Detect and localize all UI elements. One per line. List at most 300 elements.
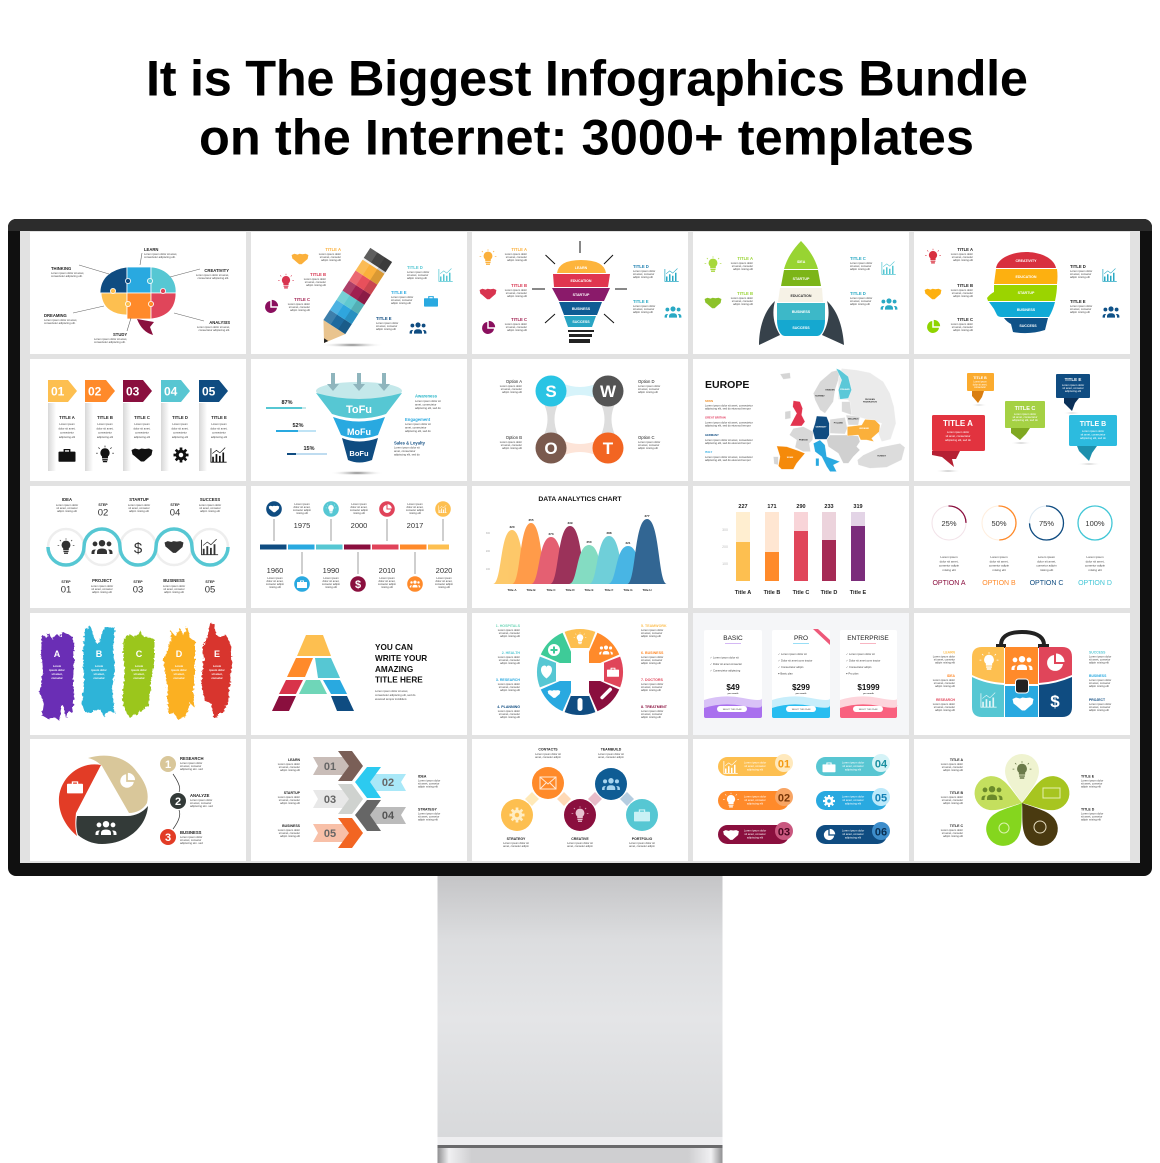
label: success: SUCCESS <box>1089 650 1106 654</box>
label: analysis: consectetur adipiscing elit. <box>198 328 230 332</box>
item: title b: adipin mising elit <box>507 294 527 298</box>
step 3 <box>160 829 203 845</box>
item: title e: adipin mising elit <box>1070 310 1090 314</box>
monitor bezel <box>8 219 1152 876</box>
label: learn <box>933 650 956 664</box>
map of Europe: UKRAINE <box>859 427 869 430</box>
column e text <box>211 415 228 439</box>
event 2010: consetur adipin <box>378 582 397 586</box>
head layers: CREATIVITY <box>1015 259 1037 263</box>
label: business: adipin mising elit <box>1089 684 1109 688</box>
hump values: 250 <box>586 540 592 544</box>
item: title c: TITLE C <box>294 297 310 302</box>
option d <box>1078 555 1112 587</box>
item: title e dark: adipin mising elit <box>376 327 396 331</box>
panel: triangle cycle <box>30 739 246 861</box>
brush A: ipsum dolor <box>49 668 65 672</box>
arrows <box>327 373 390 391</box>
event 1960: mising elit <box>269 585 281 589</box>
label: business: Lorem ipsum dolor <box>163 585 185 588</box>
bar E: 319 <box>853 504 863 510</box>
event 1975: mising elit <box>296 511 308 515</box>
event 1975: dolor sit amet, <box>294 505 311 509</box>
label 2: sit amet, consetur <box>499 658 520 662</box>
label 2: adipin mising elit <box>500 661 520 665</box>
event 2010 <box>378 566 397 589</box>
step 1: RESEARCH <box>180 756 204 761</box>
funnel MoFu <box>333 417 385 438</box>
column c text <box>134 415 151 439</box>
item: title e blue: sit amet, consetur <box>391 298 412 302</box>
brush B: B <box>96 649 103 659</box>
label 5 <box>641 624 667 638</box>
bar B: 171 <box>767 504 777 510</box>
hump values: 320 <box>509 525 515 529</box>
panel: chevron arrows <box>251 739 467 861</box>
item: title d: adipin mising elit <box>1070 275 1090 279</box>
event 2000 <box>350 502 369 530</box>
event 1990: dolor sit amet, <box>323 579 340 583</box>
label: title e <box>1081 774 1103 788</box>
brush B: sit amet, <box>94 672 105 676</box>
label: awareness: adipiscing elit, sed do <box>415 406 441 410</box>
plan: enterprise: $1999 <box>857 683 880 692</box>
plan: basic <box>704 630 762 718</box>
label: strategy: amet, consetur adipin <box>503 844 529 848</box>
arrow 04: 04 <box>382 810 395 822</box>
icon: people <box>92 540 112 554</box>
option c: dolor sit amet, <box>1037 559 1056 563</box>
column e text: dolor sit amet, <box>211 426 228 430</box>
pill 03: adipiscing elit <box>747 835 763 839</box>
pill 06: sit amet, consetur <box>842 832 864 836</box>
label: project: PROJECT <box>1089 698 1106 702</box>
icon: bulb <box>58 538 74 554</box>
label: sales and loyalty: Sales & Loyalty <box>394 440 426 446</box>
panel: paint brushes <box>30 613 246 735</box>
tag: title a: TITLE A <box>943 419 973 428</box>
brush C: ipsum dolor <box>131 668 147 672</box>
label: creative: amet, consetur adipin <box>567 844 593 848</box>
map of Europe: FEDERATION <box>863 401 877 404</box>
step 3: sit amet, consetur <box>180 838 201 842</box>
option b: sit amet, consetur <box>501 443 522 447</box>
funnel BoFu: BoFu <box>349 449 369 458</box>
connecting arc <box>173 774 180 829</box>
step 1 <box>160 756 204 772</box>
pill 04: adipiscing elit <box>845 767 861 771</box>
petal upper right <box>1017 772 1074 819</box>
letter A mosaic <box>272 635 354 711</box>
ring 50%: 50% <box>991 519 1007 528</box>
event 2017: 2017 <box>407 521 423 530</box>
pill 06: adipiscing elit <box>845 835 861 839</box>
head layers: SUCCESS <box>1019 324 1037 328</box>
circle W <box>592 376 624 406</box>
tag shadows <box>935 404 1101 472</box>
tag 05 <box>199 380 228 402</box>
item: title d <box>407 265 429 280</box>
arrow 02: 02 <box>382 777 394 789</box>
item: title d: adipin mising elit <box>850 302 870 306</box>
brush D: D <box>176 649 183 659</box>
item: title d: TITLE D <box>1070 264 1086 269</box>
label: idea: adipin mising elit <box>57 509 77 513</box>
heading: TITLE HERE <box>375 676 423 684</box>
label: project: sit amet, consetur <box>1089 705 1110 709</box>
tag 03 <box>123 380 152 402</box>
beige segment <box>88 756 148 813</box>
icon: people <box>410 322 426 334</box>
label: title b <box>941 791 963 805</box>
bar C <box>793 504 809 596</box>
plan: basic: per month <box>728 692 739 695</box>
label: title b: adipin mising elit <box>943 801 963 805</box>
event 2010: Lorem ipsum <box>379 577 395 580</box>
arrow 05 <box>313 818 363 848</box>
label: thinking <box>51 266 84 278</box>
pill 03 <box>718 822 793 844</box>
label: dreaming: DREAMING <box>44 313 67 318</box>
item: title c: Lorem ipsum dolor <box>850 262 872 265</box>
icon: gear <box>174 448 188 462</box>
column b text: consectetur <box>98 431 112 435</box>
event 2000: consetur adipin <box>350 508 369 512</box>
item: title a <box>319 247 341 262</box>
brush E <box>201 623 232 718</box>
item: title b <box>304 272 326 287</box>
label: step 03: STEP <box>133 580 143 584</box>
icon: pie <box>927 320 940 333</box>
label: contacts: amet, consetur adipin <box>535 755 561 759</box>
country note: Spain: Lorem ipsum dolor sit amet, consectetur <box>705 404 753 408</box>
option b: OPTION B <box>982 580 1016 587</box>
label: step 01: STEP <box>61 580 71 584</box>
item: title b: Lorem ipsum dolor <box>505 289 527 292</box>
label: idea <box>933 674 956 688</box>
axis labels: 300 <box>486 532 491 535</box>
label 3: adipin mising elit <box>500 688 520 692</box>
label: portfolio: PORTFOLIO <box>632 837 652 841</box>
pill 03: 03 <box>778 826 790 838</box>
label: title c: TITLE C <box>950 824 963 828</box>
event 2020: mising elit <box>438 585 450 589</box>
step 2: Lorem ipsum dolor <box>190 799 212 802</box>
bar B <box>764 504 780 596</box>
label 8: adipin mising elit <box>641 715 661 719</box>
label: sales and loyalty <box>394 440 426 456</box>
tag: title a <box>932 415 985 467</box>
plan: basic: ✓ Consectetur adipiscing <box>710 668 741 672</box>
item: title d: Lorem ipsum dolor <box>850 297 872 300</box>
bar B: Title B <box>764 590 780 596</box>
icon: people <box>96 821 116 835</box>
label 8: Lorem ipsum dolor <box>641 710 663 713</box>
plan: pro: $299 <box>792 683 810 692</box>
column a text: dolor sit amet, <box>59 426 76 430</box>
item: title b: TITLE B <box>310 272 326 277</box>
label: business: Lorem ipsum dolor <box>278 829 300 832</box>
label: idea <box>56 497 78 513</box>
label: business: adipin mising elit <box>164 590 184 594</box>
label 5: sit amet, consetur <box>641 631 662 635</box>
tag: title e: Lorem ipsum dolor <box>1062 384 1084 387</box>
column shadows <box>48 403 207 471</box>
country note: Italy: adipiscing elit, sed do eiusmod tempor <box>705 458 751 462</box>
option d: consetur adipin <box>1085 564 1105 568</box>
bar D: 233 <box>824 504 834 510</box>
option b: adipin mising elit <box>502 446 522 450</box>
label: title b: Lorem ipsum dolor <box>941 796 963 799</box>
hump titles: Title F <box>605 588 614 592</box>
handle <box>996 632 1049 646</box>
brush C <box>122 630 154 718</box>
head layers: EDUCATION <box>1015 275 1037 279</box>
map of Europe: FRANCE <box>799 439 808 442</box>
node: contacts <box>532 767 564 799</box>
option d: Lorem ipsum <box>1086 555 1104 559</box>
option a: sit amet, consetur <box>501 387 522 391</box>
map of Europe: RUSSIAN <box>865 398 875 401</box>
hump titles: Title G <box>623 588 633 592</box>
tag 02: 02 <box>88 384 102 398</box>
pill 06: 06 <box>875 826 887 838</box>
item: title a: Lorem ipsum dolor <box>951 253 973 256</box>
item: title c <box>288 297 310 312</box>
item: title c: TITLE C <box>850 256 866 261</box>
label: title a: adipin mising elit <box>943 768 963 772</box>
bulb layers: SUCCESS <box>572 320 590 324</box>
label 6: Lorem ipsum dolor <box>641 656 663 659</box>
event 2020 <box>435 566 454 589</box>
item: title c: adipin mising elit <box>507 328 527 332</box>
item: title b <box>731 291 753 306</box>
label: idea: sit amet, consetur <box>56 506 78 510</box>
label: learn <box>278 758 300 772</box>
item: title b: sit amet, consetur <box>305 280 326 284</box>
panel: letter A <box>251 613 467 735</box>
item: title b: sit amet, consetur <box>506 291 527 295</box>
pill 01: adipiscing elit <box>747 767 763 771</box>
step 3: 3 <box>165 832 171 844</box>
head layers: STARTUP <box>1018 291 1035 295</box>
heading: AMAZING <box>375 665 413 674</box>
label: startup: Lorem ipsum dolor <box>278 796 300 799</box>
item: title b: TITLE B <box>957 283 973 288</box>
label: startup: sit amet, consetur <box>128 506 150 510</box>
step 1: 1 <box>165 759 171 771</box>
column c text: TITLE C <box>134 415 150 420</box>
hump titles: Title A <box>507 588 517 592</box>
chart title: DATA ANALYTICS CHART <box>538 496 622 503</box>
brush E: ipsum dolor <box>209 668 225 672</box>
event 2000: 2000 <box>351 521 367 530</box>
arrow 02 <box>355 767 406 798</box>
panel: funnel <box>251 359 467 481</box>
arrow 03 <box>313 784 363 814</box>
tag: title b small: TITLE B <box>973 376 987 380</box>
option c: Lorem ipsum dolor <box>638 441 660 444</box>
item: title e <box>1070 299 1092 314</box>
label: startup: STARTUP <box>129 497 149 502</box>
event 1990: Lorem ipsum <box>323 577 339 580</box>
plan: enterprise: per month <box>863 692 875 695</box>
pin 1 <box>266 501 282 517</box>
label 7: sit amet, consetur <box>641 685 662 689</box>
label: creativity: CREATIVITY <box>204 268 229 273</box>
item: title a <box>951 247 973 262</box>
icon: chart <box>438 268 453 282</box>
item: title d: adipin mising elit <box>407 276 427 280</box>
arrow 01 <box>313 751 363 781</box>
event 1975 <box>293 502 312 530</box>
pill 02: Lorem ipsum dolor <box>744 796 766 798</box>
label: thinking: THINKING <box>51 266 71 271</box>
pin 3 <box>379 501 395 517</box>
pill 03: sit amet, consetur <box>744 832 766 836</box>
column a text: consectetur <box>60 431 74 435</box>
item: title e dark <box>376 316 398 331</box>
label: startup: sit amet, consetur <box>279 798 300 802</box>
item: title c: sit amet, consetur <box>952 325 973 329</box>
brush A: Lorem <box>53 665 61 668</box>
label: success: Lorem ipsum dolor <box>199 504 221 507</box>
hump values <box>509 514 650 545</box>
map of Europe: BELARUS <box>848 417 859 420</box>
label 6: sit amet, consetur <box>641 658 662 662</box>
tag: title c <box>1005 401 1045 440</box>
pill 04 <box>816 754 890 776</box>
label: learn: Lorem ipsum dolor <box>933 656 955 658</box>
label: learn: Lorem ipsum dolor <box>278 763 300 766</box>
option a <box>932 555 966 587</box>
bar 52%: 52% <box>292 423 304 429</box>
circle W: W <box>600 382 617 401</box>
label: title c: adipin mising elit <box>943 834 963 838</box>
plan: pro: ✓ Dolor sit amet cons tractor <box>778 658 812 662</box>
body text: Lorem ipsum dolor sit amet, <box>375 690 408 693</box>
column c text: adipiscing elit <box>134 435 150 439</box>
map of Europe: GERMANY <box>815 425 827 428</box>
bulb layers: STARTUP <box>573 293 590 297</box>
label 7: adipin mising elit <box>641 688 661 692</box>
ring 100%: 100% <box>1085 519 1105 528</box>
pill 06: Lorem ipsum dolor <box>842 830 864 832</box>
pill 01: 01 <box>778 758 790 770</box>
bag icons: $ <box>1050 692 1060 711</box>
item: title a: TITLE A <box>325 247 341 252</box>
label: idea: adipin mising elit <box>935 684 955 688</box>
option c <box>1030 555 1063 587</box>
rocket body: EDUCATION <box>790 294 812 298</box>
column e text: adipiscing elit <box>211 435 227 439</box>
item: title b: adipin mising elit <box>733 302 753 306</box>
item: title b: sit amet, consetur <box>952 291 973 295</box>
panel: head <box>914 232 1130 354</box>
item: title d: sit amet, consetur <box>633 272 654 276</box>
label: analysis: Lorem ipsum dolor sit amet, <box>197 326 230 329</box>
item: title d <box>850 291 872 306</box>
item: title e: Lorem ipsum dolor <box>1070 305 1092 308</box>
wave line <box>48 529 228 565</box>
bar A <box>735 504 751 596</box>
label 1 <box>496 624 521 638</box>
petal lower left <box>979 793 1036 853</box>
label: startup: adipin mising elit <box>129 509 149 513</box>
icon: pie <box>120 773 135 788</box>
tag: title a: adipiscing elit, sed do <box>945 438 971 442</box>
title: It is The Biggest Infographics Bundle <box>146 50 1028 106</box>
event 2000: mising elit <box>353 511 365 515</box>
option c: Option C <box>638 435 655 440</box>
item: title c: Lorem ipsum dolor <box>505 323 527 326</box>
hump titles: Title D <box>565 588 575 592</box>
event 2017 <box>406 502 425 530</box>
pill 01: sit amet, consetur <box>744 764 766 768</box>
brush B: Lorem <box>95 665 103 668</box>
label 7: 7. DOCTORS <box>641 678 664 682</box>
country note: Great Britain: adipiscing elit, sed do eiusmod tempor <box>705 424 751 428</box>
label 4: Lorem ipsum dolor <box>498 710 520 713</box>
column b text: Lorem ipsum <box>97 423 113 426</box>
label: step 03: 03 <box>133 584 143 596</box>
event 2010: mising elit <box>381 585 393 589</box>
item: title e: sit amet, consetur <box>633 307 654 311</box>
column c text: dolor sit amet, <box>134 426 151 430</box>
map of Europe <box>773 368 905 472</box>
column e text: Lorem ipsum <box>211 423 227 426</box>
icon: briefcase <box>424 296 438 307</box>
item: title c <box>951 317 973 332</box>
funnel ToFu <box>316 393 402 418</box>
label: analysis: ANALYSIS <box>209 320 230 325</box>
country note: Germany: adipiscing elit, sed do eiusmod tempor <box>705 441 751 445</box>
panel: speech tags <box>914 359 1130 481</box>
option d: mising elit <box>1088 568 1102 572</box>
rings <box>48 529 228 565</box>
label: business <box>278 824 301 838</box>
label: business: Lorem ipsum dolor <box>1089 679 1111 682</box>
plan: enterprise: ENTERPRISE <box>847 635 889 642</box>
option b: Lorem ipsum dolor <box>500 441 522 444</box>
bar A: 227 <box>738 504 748 510</box>
item: title a: sit amet, consetur <box>320 255 341 259</box>
label: business: sit amet, consetur <box>279 831 300 835</box>
rocket body: IDEA <box>797 260 806 264</box>
label: project: Lorem ipsum dolor <box>91 585 113 588</box>
tag: title b blue: adipiscing elit, sed do <box>1080 436 1106 440</box>
pill 05 <box>816 788 890 810</box>
label: study: consectetur adipiscing elit. <box>94 340 126 344</box>
panel: Europe map <box>693 359 909 481</box>
event 1990: 1990 <box>323 566 339 575</box>
label 3 <box>496 678 520 692</box>
column a text: adipiscing elit <box>59 435 75 439</box>
hump titles: Title H <box>642 588 652 592</box>
plan: pro: per month <box>796 692 807 695</box>
item: title e blue: adipin mising elit <box>391 301 411 305</box>
bar 52% <box>276 423 316 432</box>
label 1: sit amet, consetur <box>499 631 520 635</box>
label: business: sit amet, consetur <box>163 587 185 591</box>
item: title c: Lorem ipsum dolor <box>951 323 973 326</box>
brush B: consetur <box>93 676 105 680</box>
label 5: adipin mising elit <box>641 634 661 638</box>
brush B: ipsum dolor <box>91 668 107 672</box>
icon: briefcase <box>67 781 83 793</box>
panel: pencil <box>251 232 467 354</box>
event 1990 <box>322 566 341 589</box>
